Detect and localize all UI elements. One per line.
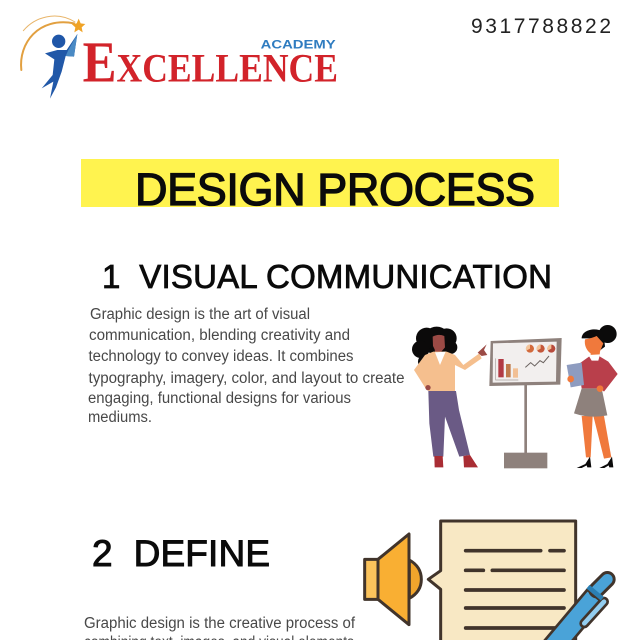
logo: figure <box>42 34 77 99</box>
illustration: speaker and document <box>365 521 607 640</box>
heading: section 2: 2 DEFINE <box>92 533 270 574</box>
document with speech pointer <box>428 521 576 640</box>
title: DESIGN PROCESS <box>135 164 535 215</box>
woman presenting <box>412 327 487 467</box>
phone number: 9317788822 <box>471 15 611 38</box>
speaker icon <box>365 534 421 625</box>
text block: section 2: Graphic design is the creative process of <box>84 615 356 632</box>
presentation board <box>489 338 562 468</box>
text block: section 1: communication, blending creativity and <box>89 327 350 344</box>
logo: star <box>72 19 85 32</box>
title banner <box>81 159 559 215</box>
text block: section 1: Graphic design is the art of visual <box>90 306 310 323</box>
logo: orange swoosh <box>21 16 75 70</box>
text block: section 1: typography, imagery, color, and layout to create <box>88 370 404 387</box>
text block: section 1: mediums. <box>88 409 152 426</box>
logo: academy text: ACADEMY <box>261 38 336 52</box>
text block: section 2 <box>84 615 356 640</box>
text block: section 1: engaging, functional designs for various <box>88 390 351 407</box>
woman with tablet <box>567 325 618 468</box>
logo <box>21 16 338 99</box>
text block: section 1: technology to convey ideas. It combines <box>88 348 354 365</box>
logo: excellence text: EXCELLENCE <box>83 30 338 95</box>
illustration: presentation <box>412 325 618 468</box>
pen icon <box>552 579 607 640</box>
text block: section 1 <box>88 306 404 426</box>
heading: section 1: 1 VISUAL COMMUNICATION <box>102 258 552 295</box>
